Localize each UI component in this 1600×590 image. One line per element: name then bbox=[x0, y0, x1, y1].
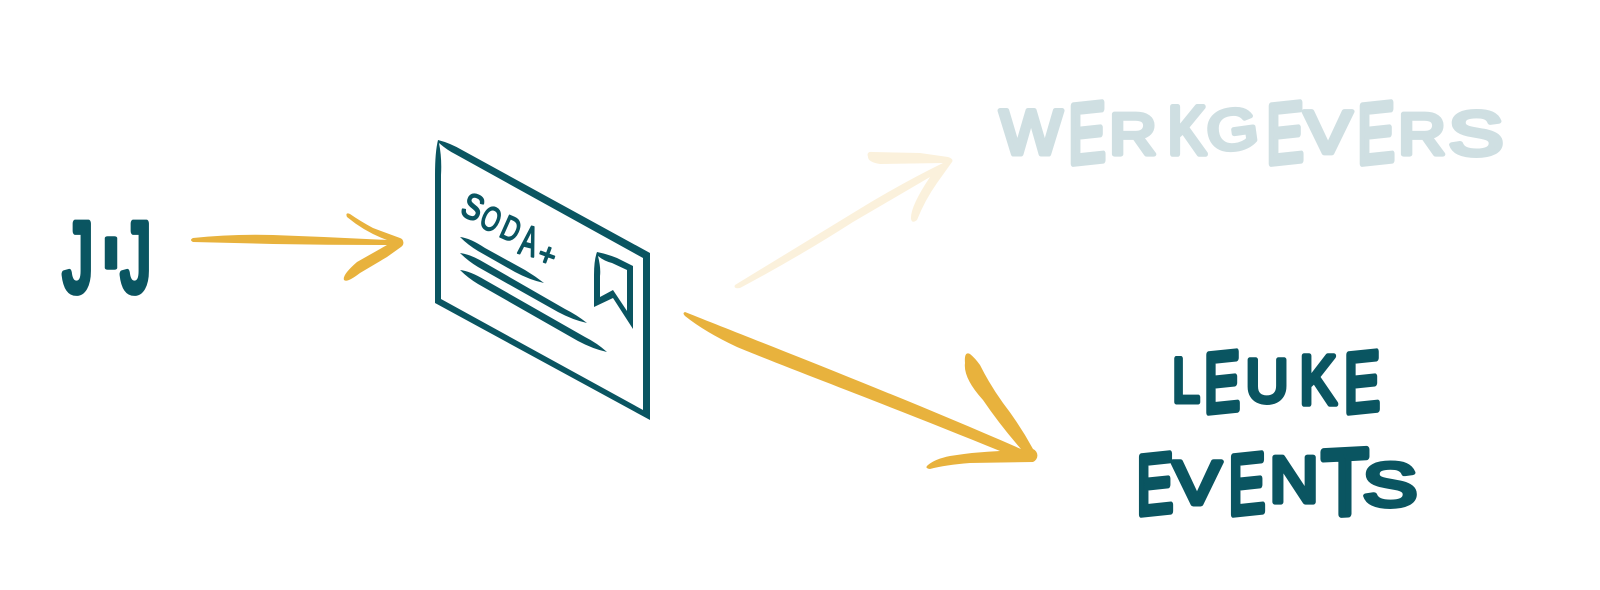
word: WERKGEVERS: E bbox=[1068, 85, 1106, 183]
card title: A bbox=[515, 217, 542, 266]
icon: bookmark bbox=[594, 252, 633, 329]
card title: D bbox=[495, 209, 527, 251]
word: WERKGEVERS: V bbox=[1304, 100, 1352, 167]
word: JIJ: I bbox=[101, 228, 121, 278]
card title bbox=[455, 185, 562, 275]
word: WERKGEVERS: S bbox=[1449, 100, 1503, 169]
word: LEUKE: U bbox=[1245, 347, 1289, 415]
word: LEUKE: K bbox=[1299, 342, 1337, 419]
card text lines bbox=[460, 237, 607, 352]
word: EVENTS: S bbox=[1363, 452, 1417, 520]
word: WERKGEVERS: W bbox=[1000, 97, 1062, 168]
word: LEUKE: E bbox=[1344, 333, 1380, 431]
word: WERKGEVERS: E bbox=[1357, 85, 1395, 183]
word: LEUKE: E bbox=[1204, 333, 1240, 431]
word: JIJ bbox=[63, 203, 151, 313]
word: WERKGEVERS: G bbox=[1203, 95, 1262, 165]
word: JIJ: J bbox=[121, 203, 151, 313]
word: EVENTS: E bbox=[1137, 437, 1173, 534]
word: LEUKE: L bbox=[1172, 347, 1200, 416]
word: EVENTS: N bbox=[1269, 444, 1319, 517]
card title: + bbox=[533, 235, 562, 275]
word: WERKGEVERS: K bbox=[1168, 91, 1206, 169]
card title: S bbox=[455, 185, 490, 230]
card: SODA+ document bbox=[435, 140, 650, 420]
word: EVENTS: E bbox=[1229, 437, 1265, 534]
word: WERKGEVERS bbox=[1000, 85, 1503, 183]
word: EVENTS: T bbox=[1322, 430, 1368, 535]
word: EVENTS bbox=[1137, 430, 1417, 535]
arrow: jij to card bbox=[191, 213, 403, 281]
word: WERKGEVERS: R bbox=[1109, 103, 1157, 167]
card outline bbox=[435, 140, 650, 420]
arrow: card to werkgevers bbox=[735, 152, 952, 288]
card title: O bbox=[474, 198, 507, 241]
word: LEUKE bbox=[1172, 333, 1380, 431]
word: WERKGEVERS: R bbox=[1398, 103, 1446, 167]
word: EVENTS: V bbox=[1173, 450, 1221, 518]
arrow: card to leuke events bbox=[684, 312, 1037, 469]
word: JIJ: J bbox=[63, 203, 93, 313]
word: WERKGEVERS: E bbox=[1266, 85, 1304, 183]
